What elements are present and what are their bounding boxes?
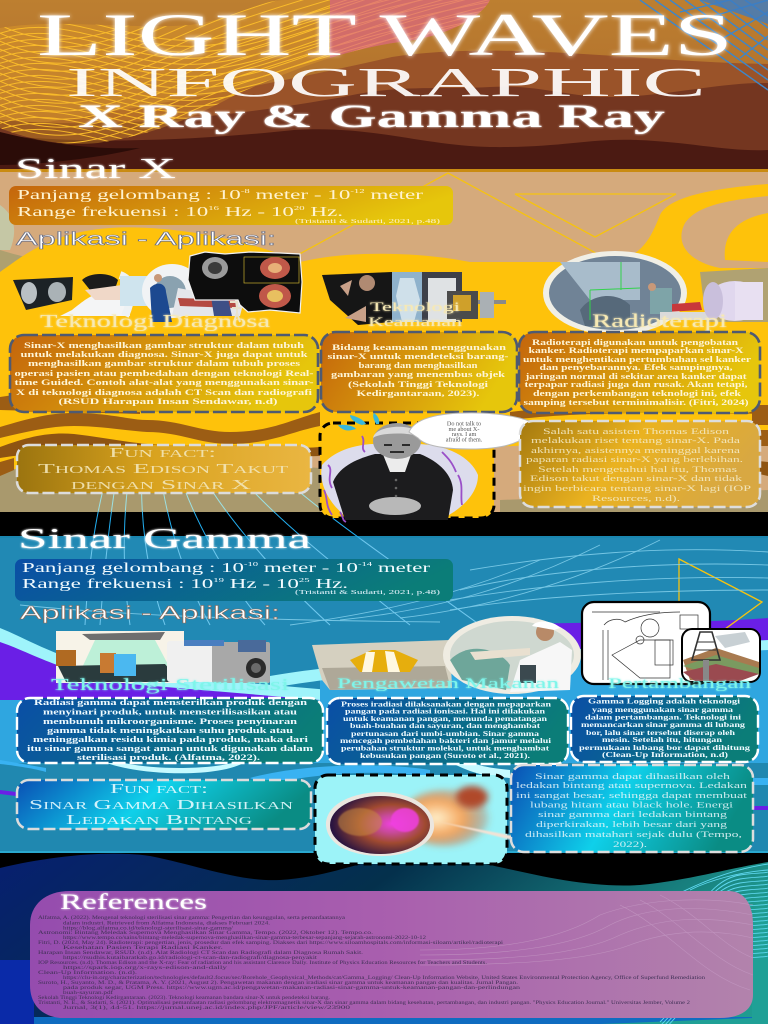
frequency text: Hz.: [305, 205, 343, 220]
reference list: buah-sayuran.pdf: [63, 989, 113, 996]
heading: References: References: [60, 889, 207, 914]
reference list: dalam industri. Retrieved from Alfatma Indonesia, diakses Februari 2024.: [63, 920, 270, 926]
label: Pertambangan: Pertambangan: [608, 676, 752, 692]
image: security technology collage: [322, 272, 506, 325]
panel: Edison story: Setelah mengetahui hal itu, Thomas: [538, 464, 738, 474]
panel: Edison story: Edison takut dengan sinar-X dan tidak: [530, 473, 743, 483]
image: radiotherapy photo: [543, 251, 763, 335]
panel: Teknologi Sterilisasi description: [17, 698, 323, 763]
label: Teknologi Sterilisasi: Teknologi Sterilisasi: [51, 675, 289, 694]
decorative cyan mesh: [660, 850, 768, 1024]
panel: Pertambangan description: [571, 696, 758, 762]
panel: Teknologi Keamanan description: sinar-X untuk mendeteksi barang-: [328, 352, 509, 361]
wavelength text: -14: [358, 561, 373, 568]
reference list: Jurnal, 3(1), 44-51. https://jurnal.unej.ac.id/index.php/JPF/article/view/23900: [63, 1004, 351, 1011]
panel: Teknologi Diagnosa description: X di teknologi diagnosa adalah CT Scan dan radiografi: [16, 388, 313, 397]
image: mining diagram: [582, 602, 760, 684]
wavelength text: meter: [372, 561, 431, 576]
citation: (Tristanti & Sudarti, 2021, p.48): [295, 218, 440, 225]
label: Pengawetan Makanan: Pengawetan Makanan: [337, 676, 560, 692]
panel: Radioterapi description: samping tersebut terminimalisir. (Fitri, 2024): [524, 398, 749, 407]
frequency text: Hz.: [310, 577, 348, 592]
panel: Teknologi Sterilisasi description: gamma tidak meningkatkan suhu produk atau: [47, 726, 294, 735]
heading: Aplikasi Gamma: Aplikasi - Aplikasi:: [20, 603, 280, 623]
panel: Pengawetan Makanan description: untuk keamanan pangan, menunda pematangan: [343, 715, 547, 723]
panel: Fun fact gamma: Fun fact:: [110, 782, 208, 797]
background: blue corner mesh: [640, 0, 768, 90]
reference list: https://blog.alfatma.co.id/teknologi-sterilisasi-sinar-gamma/: [63, 924, 234, 932]
panel: Edison story: Resources, n.d).: [592, 493, 680, 503]
wavelength text: meter - 10: [258, 561, 358, 576]
panel: Edison story: paparan radiasi sinar-X yang berlebihan.: [526, 454, 743, 464]
label: Teknologi Diagnosa: Teknologi Diagnosa: [40, 311, 270, 331]
panel: Radioterapi description: terpapar radiasi juga dan rusak. Akan tetapi,: [524, 380, 748, 389]
reference list: Sekolah Tinggi Teknologi Kedirgantaraan. (2023). Teknologi keamanan bandara sinar-X untuk pendeteksi barang.: [38, 994, 330, 1001]
wavelength text: -12: [350, 188, 365, 195]
frequency text: Hz - 10: [224, 577, 299, 592]
panel: supernova explanation: dihasilkan matahari sejak dulu (Tempo,: [525, 829, 742, 839]
panel: Fun fact gamma: Sinar Gamma Dihasilkan: [29, 798, 293, 813]
frequency text: 25: [299, 577, 310, 584]
panel: Teknologi Sterilisasi description: menyinari produk, untuk mensterilisasikan atau: [43, 708, 298, 716]
reference list: https://rsudhis.kutaibaratkab.go.id/radiologi-ct-scan-dan-radiografi/diagnosa-penyakit: [63, 954, 318, 961]
reference list: Kesehatan Pasien Terapi Radiasi Kanker.: [63, 945, 223, 951]
panel: Teknologi Diagnosa description: untuk melakukan diagnosa. Sinar-X juga dapat untuk: [20, 350, 308, 359]
reference list: Clean-Up Information. (n.d).: [38, 969, 137, 976]
title line: X Ray and Gamma Ray: X Ray & Gamma Ray: [78, 99, 666, 135]
panel: Fun fact Thomas Edison: Thomas Edison Takut: [38, 462, 288, 477]
panel: Pengawetan Makanan description: perubahan struktur molekul, untuk menghambat: [341, 744, 550, 752]
panel: supernova explanation: sinar gamma dari ledakan bintang: [538, 809, 728, 819]
frequency text: Range frekuensi : 10: [17, 205, 133, 220]
panel: Fun fact Thomas Edison: dengan Sinar X: [71, 478, 251, 493]
reference list: [38, 914, 706, 1011]
heading: Sinar X: Sinar X: [15, 154, 176, 185]
panel: Pengawetan Makanan description: mencegah pembelahan bakteri dan jamur melalui: [340, 737, 551, 745]
reference list: https://clu-in.org/characterization/technologies/default2.focus/sec/Borehole_Geophysical_Methods/cat/Gamma_Logging/ Clean-Up Information Website, United States Environmental Protection Agency, Office of Superfund Remediation: [63, 974, 706, 981]
reference list: https://spark.iop.org/x-rays-edison-and-dally: [63, 965, 228, 971]
panel: Teknologi Diagnosa description: Sinar-X menghasilkan gambar struktur dalam tubuh: [24, 341, 305, 350]
panel: Pengawetan Makanan description: pertunasan dari umbi-umbian. Sinar gamma: [351, 730, 540, 738]
panel: Teknologi Sterilisasi description: itu sinar gamma sangat aman untuk digunakan dalam: [27, 744, 314, 753]
panel: supernova explanation: Sinar gamma dapat dihasilkan oleh: [535, 771, 731, 781]
title: [37, 2, 733, 135]
background: Sinar X section: [0, 169, 768, 515]
panel: Fun fact gamma: [17, 780, 311, 829]
panel: Radioterapi description: jaringan normal di sekitar area kanker dapat: [524, 372, 747, 381]
citation: (Tristanti & Sudarti, 2021, p.48): [295, 589, 440, 596]
reference list: Fitri, D. (2024, May 24). Radioterapi: pengertian, jenis, prosedur dan efek samping. Diakses dari https://www.siloamhospitals.com/informasi-siloam/artikel/radioterapi: [38, 939, 504, 946]
wavelength text: Panjang gelombang : 10: [17, 188, 153, 203]
image: diagnostic technology collage: [13, 252, 302, 322]
panel: Teknologi Diagnosa description: [10, 335, 318, 412]
reference list: Astronomi: Bintang Meledak Supernova Menghasilkan Sinar Gamma, Tempo. (2022, Oktober 12). Tempo.co.: [38, 929, 373, 936]
panel: Pertambangan description: (Clean-Up Information, n.d): [602, 751, 729, 759]
panel: Teknologi Diagnosa description: operasi pasien atau pembedahan dengan teknologi Real-: [14, 369, 314, 378]
label: Radioterapi: Radioterapi: [592, 311, 727, 332]
panel: Teknologi Sterilisasi description: sterilisasi produk. (Alfatma, 2022).: [77, 753, 260, 762]
image: Thomas Edison portrait: [320, 413, 494, 522]
background: Sinar Gamma section: [0, 536, 768, 853]
panel: Pengawetan Makanan description: [327, 698, 568, 764]
reference list: https://www.tempo.co/sains/bintang-meledak-supernova-menghasilkan-sinar-gamma-terbesar-sepanjang-sejarah-astronomi-2022-10-12: [63, 935, 427, 941]
background: gold and pink wave mesh: [0, 0, 490, 144]
reference list: Harapan Insan Sendawar, RSUD. (n.d). Alat Radiologi CT Scan dan Radiografi dalam Diagnosa Rumah Sakit.: [38, 949, 363, 956]
panel: supernova explanation: ledakan bintang atau supernova. Ledakan: [516, 780, 748, 790]
panel: supernova explanation: ini sangat besar, sehingga dapat membuat: [516, 790, 748, 800]
panel: Edison story: akhirnya, asistennya meninggal karena: [531, 445, 740, 455]
panel: Edison story: melakukan riset tentang sinar-X. Pada: [531, 435, 740, 445]
wavelength text: meter: [365, 188, 424, 203]
panel: Edison story: [520, 421, 760, 507]
panel: Teknologi Diagnosa description: menghasilkan gambar struktur dalam tubuh proses: [28, 359, 300, 368]
panel: Pertambangan description: memancarkan sinar gamma di lubang: [581, 721, 746, 729]
panel: Radioterapi description: [519, 332, 760, 413]
background: header waves: [0, 0, 768, 172]
callout: Edison speech bubble: me about X-: [449, 426, 479, 433]
background: black band: [0, 512, 768, 538]
panel: Teknologi Keamanan description: Kedirgantaraan, 2023).: [356, 389, 480, 398]
panel: Pertambangan description: yang menggunakan sinar gamma: [592, 706, 734, 714]
panel: references: [30, 889, 753, 1018]
reference list: Suroto, H., Suyanto, M. D., & Pratama, A. Y. (2021, August 2). Pengawetan makanan dengan iradiasi sinar gamma untuk keamanan pangan dan kualitas. Jurnal Pangan.: [38, 979, 518, 986]
panel: Pertambangan description: dalam pertambangan. Teknologi ini: [585, 714, 741, 722]
panel: Fun fact Thomas Edison: [17, 445, 311, 493]
panel: Teknologi Keamanan description: [321, 332, 517, 412]
image: supernova: [315, 775, 525, 864]
reference list: Alfatma, A. (2022). Mengenal teknologi sterilisasi sinar gamma: Pengertian dan keunggulan, serta pemanfaatannya: [38, 914, 346, 921]
panel: Teknologi Sterilisasi description: meninggalkan residu kimia pada produk, maka dari: [33, 735, 309, 744]
panel: Sinar X wavelength and frequency: [9, 186, 453, 225]
panel: Teknologi Sterilisasi description: membunuh mikroorganisme. Proses penyinaran: [43, 717, 298, 726]
decorative fan lines: [85, 470, 480, 625]
panel: Radioterapi description: dan penyebarannya. Efek sampingnya,: [540, 363, 732, 372]
reference list: IOP Resources. (n.d). Thomas Edison and the X-ray: Fear of radiation and his assistant Clarence Dally. Institute of Physics Education Resources for Teachers and Students.: [38, 959, 487, 966]
label: Teknologi Keamanan: [368, 300, 463, 329]
label: Teknologi Keamanan: Teknologi: [370, 300, 461, 314]
frequency text: 19: [213, 577, 224, 584]
callout: Edison speech bubble: rays. I am: [452, 431, 476, 438]
callout: Edison speech bubble: Do not talk to: [447, 420, 481, 428]
panel: Fun fact gamma: Ledakan Bintang: [66, 813, 252, 828]
callout: Edison speech bubble: afraid of them.: [446, 436, 483, 444]
panel: Pengawetan Makanan description: kebusukan pangan (Suroto et al., 2021).: [360, 752, 530, 760]
frequency text: 20: [294, 205, 305, 212]
panel: Pengawetan Makanan description: pangan pada radiasi ionisasi. Hal ini dilakukan: [345, 708, 545, 716]
panel: Radioterapi description: kanker. Radioterapi mempaparkan sinar-X: [528, 346, 744, 355]
heading: Aplikasi X: Aplikasi - Aplikasi:: [16, 229, 276, 249]
title line: Light Waves: LIGHT WAVES: [37, 2, 733, 68]
title line: Infographic: INFOGRAPHIC: [66, 59, 706, 105]
wavelength text: meter - 10: [250, 188, 350, 203]
frequency text: Range frekuensi : 10: [22, 577, 138, 592]
panel: Radioterapi description: dengan perkembangan teknologi ini, efek: [533, 389, 742, 398]
panel: supernova explanation: diperkirakan, lebih besar dari yang: [536, 819, 728, 829]
panel: Pengawetan Makanan description: Proses iradiasi dilaksanakan dengan mepaparkan: [341, 700, 551, 708]
label: Teknologi Keamanan: Keamanan: [368, 315, 463, 329]
reference list: pada produk segar, UGM Press. https://www.ugm.ac.id/pengawetan-makanan-radiasi-sinar-gamma-untuk-keamanan-pangan-dan-perlindungan: [63, 985, 521, 991]
panel: Pertambangan description: Gamma Logging adalah teknologi: [588, 698, 740, 706]
panel: supernova explanation: [511, 765, 753, 852]
wavelength text: Panjang gelombang : 10: [22, 561, 158, 576]
image: food irradiation photo: [312, 616, 581, 694]
panel: Radioterapi description: untuk menghentikan pertumbuhan sel kanker: [523, 355, 752, 364]
panel: supernova explanation: 2022).: [613, 839, 647, 849]
wavelength text: -8: [241, 188, 250, 195]
panel: Teknologi Keamanan description: gambaran yang menembus objek: [331, 370, 506, 379]
panel: Sinar Gamma wavelength and frequency: [15, 559, 453, 601]
panel: Pertambangan description: permukaan lubang bor dapat dihitung: [579, 744, 751, 752]
wavelength text: -10: [244, 561, 258, 568]
image: sterilisation equipment: [56, 631, 270, 683]
panel: Pertambangan description: bor, lalu sinar tersebut diserap oleh: [586, 729, 735, 737]
panel: Teknologi Keamanan description: (Sekolah Tinggi Teknologi: [348, 380, 489, 389]
frequency text: Hz - 10: [219, 205, 294, 220]
panel: Fun fact Thomas Edison: Fun fact:: [109, 446, 216, 461]
panel: Pertambangan description: mesin. Setelah itu, hitungan: [602, 736, 722, 744]
heading: Sinar Gamma: Sinar Gamma: [18, 523, 311, 555]
panel: Teknologi Keamanan description: Bidang keamanan menggunakan: [332, 343, 507, 352]
panel: Teknologi Diagnosa description: time Guided. Contoh alat-alat yang menggunakan sinar-: [14, 378, 314, 387]
panel: Edison story: ingin berbicara tentang sinar-X lagi (IOP: [523, 483, 751, 493]
panel: supernova explanation: lubang hitam atau black hole. Energi: [530, 800, 734, 810]
panel: Teknologi Keamanan description: barang dan menghasilkan: [358, 361, 478, 370]
panel: Radioterapi description: Radioterapi digunakan untuk pengobatan: [532, 338, 739, 347]
reference list: Tristanti, N. E., & Sudarti, S. (2021). Optimalisasi pemanfaatan radiasi gelombang elektromagnetik sinar-X dan sinar gamma dalam bidang kesehatan, pertambangan, dan industri pangan. "Physics Education Journal." Universitas Jember, Volume 2: [38, 999, 690, 1006]
background: bottom section: [0, 853, 768, 1024]
panel: Teknologi Diagnosa description: (RSUD Harapan Insan Sendawar, n.d): [58, 397, 278, 406]
panel: Teknologi Sterilisasi description: Radiasi gamma dapat mensterilkan produk dengan: [34, 698, 308, 707]
frequency text: 16: [208, 205, 220, 212]
callout: Edison speech bubble: [409, 413, 534, 449]
panel: Pengawetan Makanan description: buah-buahan dan sayuran, dan menghambat: [350, 722, 541, 730]
panel: Edison story: Salah satu asisten Thomas Edison: [543, 426, 730, 436]
